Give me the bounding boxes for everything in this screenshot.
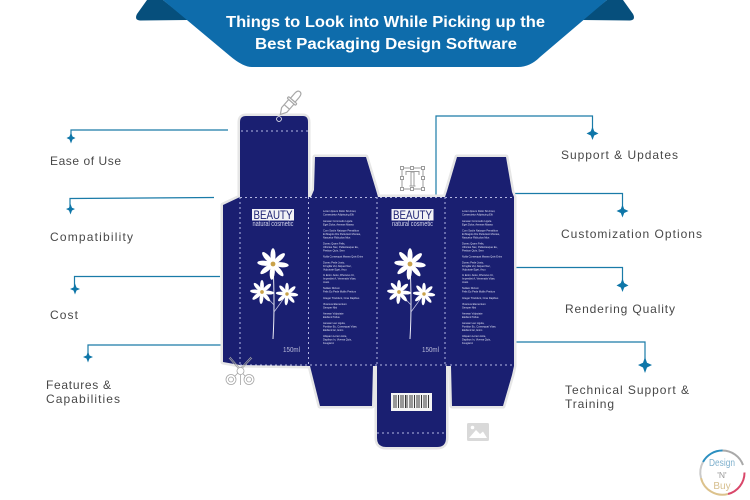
label: technical support and training	[565, 383, 689, 411]
side panel text 2: Semper Nisi	[462, 306, 477, 310]
logo: Design N Buy: 'N'	[717, 470, 727, 480]
leader: customization options	[513, 194, 628, 218]
leader: cost	[70, 276, 220, 294]
left labels	[46, 154, 133, 406]
volume: 150ml	[422, 347, 439, 354]
label: customization options: Customization Options	[561, 227, 702, 241]
side panel text 2	[462, 209, 502, 345]
side panel text 2: Nascetur Ridiculus Mus	[462, 236, 490, 240]
side panel text 2: Nullam Dictum	[462, 286, 479, 290]
side panel text 2: Felis Eu Pede Mollis Pretium	[462, 290, 495, 294]
side panel text 2: In Enim Justo, Rhoncus Ut,	[462, 273, 494, 277]
brand label: natural cosmetic	[392, 221, 433, 228]
packaging dieline box	[223, 116, 514, 447]
side panel text 2: Nulla Consequat Massa Quis Enim	[462, 254, 502, 258]
flap hole	[277, 117, 281, 121]
logo: Design N Buy	[700, 450, 745, 495]
side panel text 1: Semper Nisi	[323, 306, 338, 310]
side panel text 1: Eleifend Ac, Enim	[323, 328, 343, 332]
side panel text 2: Ultricies Nec, Pellentesque Eu,	[462, 245, 498, 249]
side panel text 1: Aenean Vulputate	[323, 312, 344, 316]
side panel text 1: Porttitor Eu, Consequat Vitae,	[323, 324, 358, 328]
label: features and capabilities: Capabilities	[46, 392, 120, 406]
side panel text 2: Fringilla Vel, Aliquet Nec,	[462, 264, 491, 268]
icon: text tool	[400, 166, 424, 190]
side panel text 1: Ultricies Nec, Pellentesque Eu,	[323, 245, 359, 249]
side panel text 2: Eget Dolor, Aenean Massa	[462, 222, 493, 226]
side panel text 1: Fringilla Vel, Aliquet Nec,	[323, 264, 352, 268]
side panel text 2: Eleifend Tellus	[462, 315, 479, 319]
side panel text 1: Felis Eu Pede Mollis Pretium	[323, 290, 356, 294]
side panel text 1: Justo	[323, 280, 330, 284]
side panel text 2: Et Magnis Dis Parturient Montes,	[462, 232, 500, 236]
side panel text 2: Cum Sociis Natoque Penatibus	[462, 228, 499, 232]
label: technical support and training: Training	[565, 397, 614, 411]
flower illustration	[250, 248, 298, 339]
side panel text 1: Imperdiet A, Venenatis Vitae,	[323, 276, 357, 280]
label: rendering quality: Rendering Quality	[565, 302, 675, 316]
side panel text 1: Aliquam Lorem Ante,	[323, 334, 347, 338]
side panel text 1: Integer Tincidunt, Cras Dapibus	[323, 296, 360, 300]
front panel 1	[250, 209, 300, 354]
side panel text 1: In Enim Justo, Rhoncus Ut,	[323, 273, 355, 277]
icon: image placeholder	[467, 423, 489, 441]
leader: ease of use	[66, 130, 228, 144]
side panel text 1: Nullam Dictum	[323, 286, 340, 290]
side panel text 2: Aenean Vulputate	[462, 312, 483, 316]
side panel text 1: Donec Pede Justo,	[323, 260, 345, 264]
side panel text 2: Pretium Quis, Sem	[462, 248, 484, 252]
flower illustration	[387, 248, 435, 339]
side panel text 1: Feugiat A	[323, 341, 334, 345]
side panel text 1: Eleifend Tellus	[323, 315, 340, 319]
side panel text 2: Vulputate Eget, Arcu	[462, 268, 486, 272]
side panel text 1: Vivamus Elementum	[323, 302, 347, 306]
side panel text 1: Et Magnis Dis Parturient Montes,	[323, 232, 361, 236]
side panel text 1: Aenean Commodo Ligula	[323, 219, 353, 223]
side panel text 2: Integer Tincidunt, Cras Dapibus	[462, 296, 499, 300]
side panel text 2: Justo	[462, 280, 469, 284]
side panel text 1	[323, 209, 363, 345]
fold lines	[240, 131, 514, 433]
logo: Design N Buy: Buy	[713, 481, 731, 492]
leader lines left side	[66, 130, 232, 362]
side panel text 2: Aenean Commodo Ligula	[462, 219, 492, 223]
logo: Design N Buy: Design	[709, 458, 735, 469]
brand label: BEAUTY	[254, 210, 293, 222]
side panel text 2: Porttitor Eu, Consequat Vitae,	[462, 324, 497, 328]
side panel text 1: Pretium Quis, Sem	[323, 248, 345, 252]
side panel text 1: Eget Dolor, Aenean Massa	[323, 222, 354, 226]
brand label: natural cosmetic	[252, 221, 294, 228]
side panel text 1: Nascetur Ridiculus Mus	[323, 236, 351, 240]
leader: compatibility	[66, 198, 214, 214]
side panel text 1: Nulla Consequat Massa Quis Enim	[323, 254, 363, 258]
title banner	[136, 0, 634, 67]
side panel text 1: Lorem Ipsum Dolor Sit Amet,	[323, 209, 356, 213]
right labels	[561, 148, 702, 411]
side panel text 2: Aenean Leo Ligula,	[462, 321, 485, 325]
side panel text 2: Vivamus Elementum	[462, 302, 486, 306]
title text: Things to Look into While Picking up the	[226, 14, 545, 31]
side panel text 2: Donec Pede Justo,	[462, 260, 484, 264]
banner left fold	[136, 0, 188, 20]
label: features and capabilities	[46, 378, 120, 406]
label: cost: Cost	[50, 308, 79, 322]
label: ease of use: Ease of Use	[50, 154, 121, 168]
label: support and updates: Support & Updates	[561, 148, 678, 162]
side panel text 2: Aliquam Lorem Ante,	[462, 334, 486, 338]
side panel text 2: Eleifend Ac, Enim	[462, 328, 482, 332]
banner right fold	[582, 0, 634, 20]
barcode	[391, 393, 432, 411]
label: compatibility: Compatibility	[50, 230, 133, 244]
leader: rendering quality	[516, 268, 628, 292]
volume: 150ml	[283, 347, 300, 354]
label: technical support and training: Technical Support &	[565, 383, 689, 397]
side panel text 1: Consectetur Adipiscing Elit	[323, 212, 354, 216]
box shape	[223, 116, 514, 447]
side panel text 2: Dapibus In, Viverra Quis,	[462, 338, 491, 342]
side panel text 2: Feugiat A	[462, 341, 473, 345]
side panel text 2: Imperdiet A, Venenatis Vitae,	[462, 276, 496, 280]
leader: features	[83, 345, 232, 362]
side panel text 2: Lorem Ipsum Dolor Sit Amet,	[462, 209, 495, 213]
title text: Best Packaging Design Software	[255, 36, 517, 53]
side panel text 1: Vulputate Eget, Arcu	[323, 268, 347, 272]
side panel text 2: Consectetur Adipiscing Elit	[462, 212, 493, 216]
banner body	[163, 0, 607, 67]
leader lines right side	[436, 116, 652, 373]
side panel text 2: Donec Quam Felis,	[462, 242, 484, 246]
title text	[226, 14, 545, 53]
front panel 2	[387, 209, 439, 354]
side panel text 1: Aenean Leo Ligula,	[323, 321, 346, 325]
brand label	[252, 209, 294, 228]
side panel text 1: Cum Sociis Natoque Penatibus	[323, 228, 360, 232]
label: features and capabilities: Features &	[46, 378, 111, 392]
side panel text 1: Donec Quam Felis,	[323, 242, 345, 246]
icon: eyedropper	[276, 88, 304, 118]
side panel text 1: Dapibus In, Viverra Quis,	[323, 338, 352, 342]
brand label: BEAUTY	[393, 210, 432, 222]
brand label	[392, 209, 434, 228]
leader: technical support	[516, 342, 652, 373]
icon: scissors	[226, 357, 254, 385]
leader: support and updates	[436, 116, 598, 196]
